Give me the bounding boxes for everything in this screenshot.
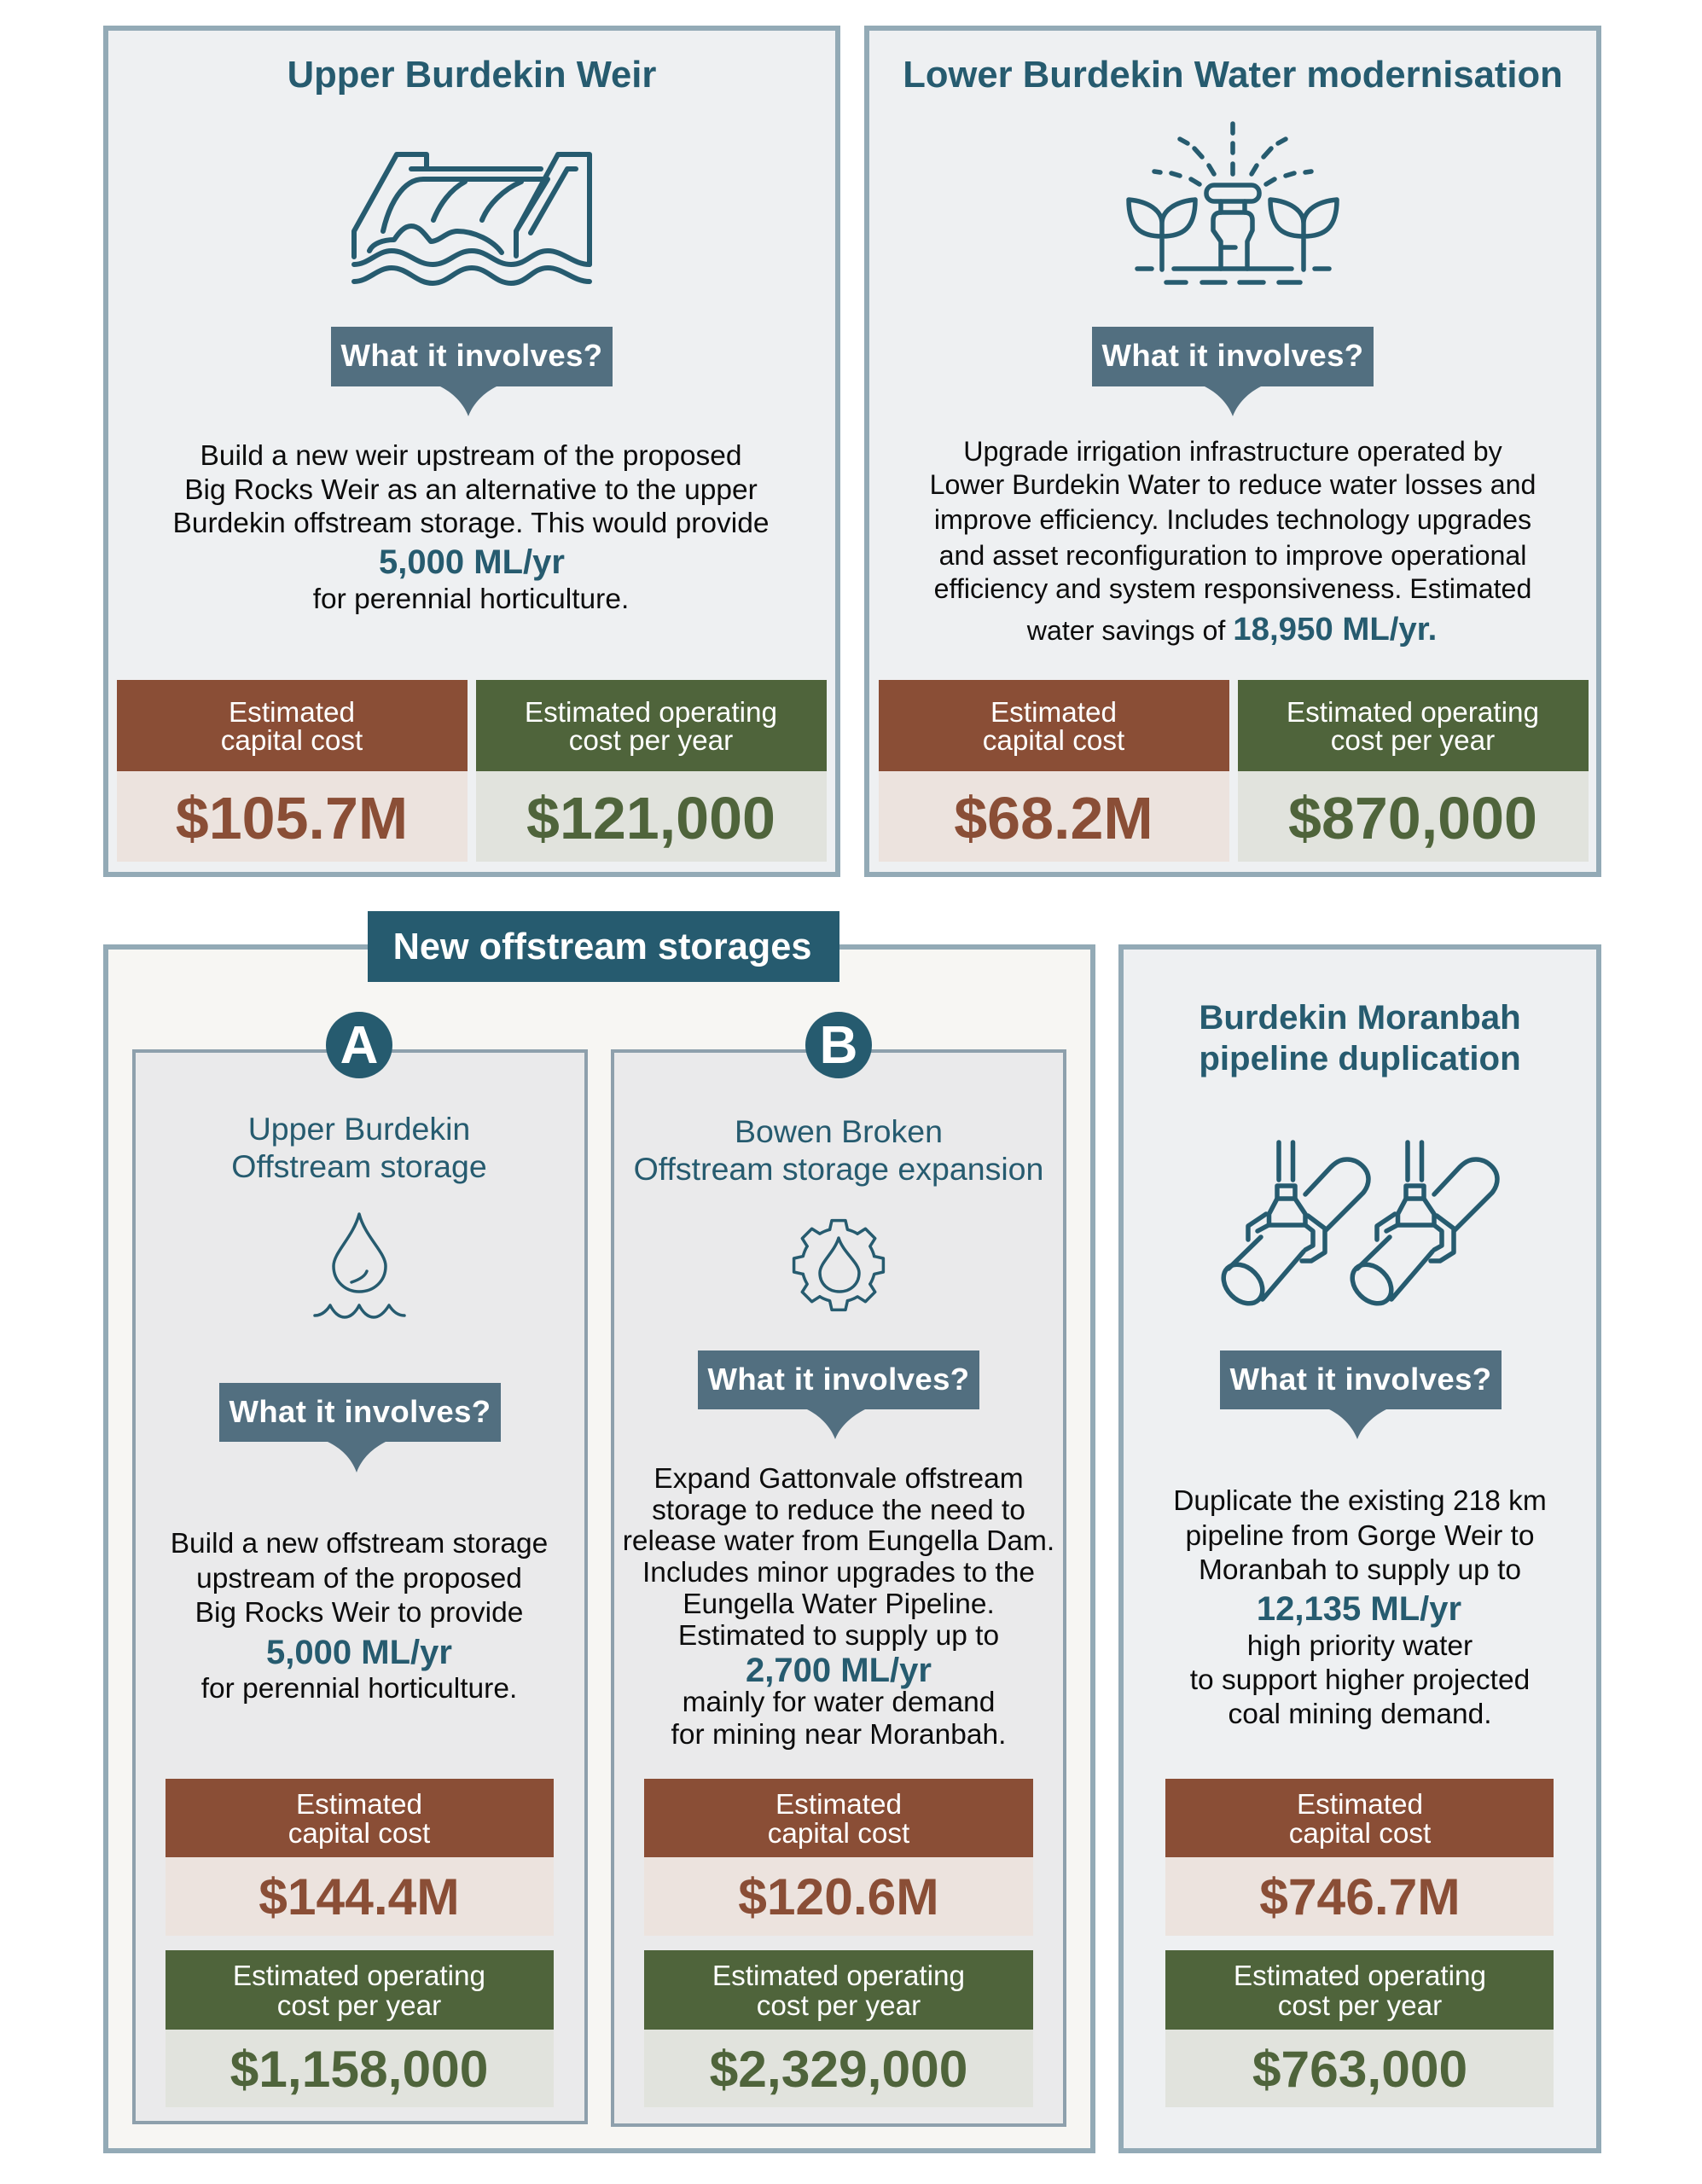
text block: description: Burdekin offstream storage. This would provide <box>173 508 769 539</box>
text block: description: 12,135 ML/yr <box>1257 1590 1461 1628</box>
heading: Upper Burdekin Weir: Upper Burdekin Weir <box>288 55 656 96</box>
icon: sprinkler and plants <box>1129 124 1337 282</box>
capital cost card: capital cost <box>1289 1818 1431 1850</box>
capital cost card: capital cost <box>768 1818 909 1850</box>
text block: description: Lower Burdekin Water to reduce water losses and <box>930 469 1536 500</box>
text block: description: Build a new offstream storage <box>171 1528 548 1560</box>
text block: description: Build a new weir upstream of the proposed <box>200 440 742 472</box>
text block: description: for perennial horticulture. <box>313 584 629 615</box>
capital cost card: Estimated <box>990 697 1117 729</box>
badge B: B <box>820 1016 857 1075</box>
text block: description: to support higher projected <box>1190 1664 1530 1696</box>
operating cost card: $870,000 <box>1288 785 1537 851</box>
operating cost card <box>1238 680 1589 862</box>
operating cost card <box>166 1950 554 2107</box>
capital cost card: Estimated <box>775 1789 902 1821</box>
text block: description: storage to reduce the need to <box>652 1495 1025 1526</box>
text block: description: Includes minor upgrades to the <box>642 1557 1035 1589</box>
capital cost card: $68.2M <box>954 785 1153 851</box>
operating cost card: $2,329,000 <box>710 2040 967 2098</box>
text block: description <box>173 440 769 615</box>
heading: B: Offstream storage expansion <box>634 1151 1043 1187</box>
heading: B <box>634 1113 1043 1187</box>
operating cost card: Estimated operating <box>525 697 777 729</box>
text block: description: and asset reconfiguration to improve operational <box>939 540 1526 571</box>
text block: description <box>1173 1485 1547 1730</box>
capital cost card: Estimated <box>229 697 355 729</box>
operating cost card: Estimated operating <box>712 1960 965 1992</box>
operating cost card: Estimated operating <box>1287 697 1539 729</box>
sub-panel A: Upper Burdekin Offstream storage <box>134 1012 586 2123</box>
callout: What it involves?: What it involves? <box>1230 1362 1491 1397</box>
capital cost card: capital cost <box>221 725 363 757</box>
capital cost card <box>1165 1779 1554 1936</box>
capital cost card <box>644 1779 1033 1936</box>
callout: What it involves?: What it involves? <box>708 1362 969 1397</box>
text block: description: for perennial horticulture. <box>201 1673 517 1705</box>
callout: What it involves?: What it involves? <box>229 1394 491 1429</box>
text block: description: water savings of 18,950 ML/yr. <box>1026 611 1437 648</box>
badge B <box>805 1012 872 1078</box>
heading: Lower Burdekin Water modernisation: Lower Burdekin Water modernisation <box>903 55 1563 96</box>
capital cost card <box>166 1779 554 1936</box>
operating cost card: Estimated operating <box>1234 1960 1486 1992</box>
text block: description: Big Rocks Weir to provide <box>195 1597 523 1629</box>
heading: Burdekin Moranbah pipeline duplication: pipeline duplication <box>1199 1039 1521 1077</box>
text block: description: high priority water <box>1247 1630 1473 1662</box>
callout: What it involves? <box>1092 327 1374 416</box>
operating cost card: cost per year <box>757 1990 921 2022</box>
capital cost card: capital cost <box>983 725 1124 757</box>
heading tab: New offstream storages: New offstream storages <box>393 926 811 967</box>
heading: Burdekin Moranbah pipeline duplication: Burdekin Moranbah <box>1199 998 1521 1037</box>
callout: What it involves?: What it involves? <box>1102 338 1363 373</box>
capital cost card: $144.4M <box>258 1867 460 1926</box>
operating cost card: cost per year <box>277 1990 441 2022</box>
text block: description: coal mining demand. <box>1228 1699 1492 1730</box>
callout: What it involves? <box>219 1383 501 1472</box>
badge A: A <box>340 1016 378 1075</box>
capital cost card: $746.7M <box>1259 1867 1461 1926</box>
operating cost card: $763,000 <box>1252 2040 1467 2098</box>
panel: Burdekin Moranbah pipeline duplication <box>1121 947 1599 2151</box>
badge A <box>326 1012 392 1078</box>
capital cost card: capital cost <box>288 1818 430 1850</box>
operating cost card: cost per year <box>569 725 733 757</box>
text block: description: 5,000 ML/yr <box>266 1634 452 1671</box>
operating cost card: cost per year <box>1331 725 1495 757</box>
text block: description: improve efficiency. Includes technology upgrades <box>934 504 1531 535</box>
text block: description: Upgrade irrigation infrastructure operated by <box>963 436 1503 467</box>
operating cost card: cost per year <box>1278 1990 1442 2022</box>
text block: description: 5,000 ML/yr <box>379 543 565 581</box>
heading: A <box>231 1111 487 1184</box>
text block: description: Estimated to supply up to <box>678 1620 999 1652</box>
text block: description <box>623 1463 1054 1751</box>
callout: What it involves?: What it involves? <box>341 338 602 373</box>
text block: description: Expand Gattonvale offstream <box>653 1463 1024 1495</box>
heading tab: New offstream storages <box>368 911 839 982</box>
heading: A: Offstream storage <box>231 1148 487 1184</box>
panel: Lower Burdekin Water modernisation <box>867 28 1599 874</box>
callout: What it involves? <box>1220 1350 1502 1439</box>
capital cost card <box>879 680 1229 862</box>
text block: description: Duplicate the existing 218 km <box>1173 1485 1547 1517</box>
text block: description: mainly for water demand <box>683 1687 995 1718</box>
panel: New offstream storages <box>106 911 1093 2151</box>
operating cost card: $1,158,000 <box>230 2040 488 2098</box>
text block: description: pipeline from Gorge Weir to <box>1185 1520 1535 1552</box>
panel: Upper Burdekin Weir <box>106 28 838 874</box>
capital cost card <box>117 680 468 862</box>
sub-panel B: Bowen Broken Offstream storage expansion <box>613 1012 1065 2125</box>
capital cost card: $105.7M <box>176 785 408 851</box>
text block: description: release water from Eungella Dam. <box>623 1525 1054 1557</box>
icon: gear with water drop <box>793 1220 884 1310</box>
text block: description: Big Rocks Weir as an alternative to the upper <box>184 474 758 506</box>
capital cost card: Estimated <box>296 1789 422 1821</box>
callout: What it involves? <box>331 327 613 416</box>
text block: description: 2,700 ML/yr <box>746 1652 932 1689</box>
callout: What it involves? <box>698 1350 979 1439</box>
text block: description <box>930 436 1536 648</box>
heading: B: Bowen Broken <box>735 1113 943 1149</box>
icon: weir <box>354 154 590 283</box>
operating cost card: Estimated operating <box>233 1960 485 1992</box>
text block: description: Moranbah to supply up to <box>1199 1554 1521 1586</box>
heading: Burdekin Moranbah pipeline duplication <box>1199 998 1521 1077</box>
capital cost card: $120.6M <box>738 1867 939 1926</box>
text block: description: for mining near Moranbah. <box>671 1719 1006 1751</box>
text block: description <box>171 1528 548 1705</box>
operating cost card <box>1165 1950 1554 2107</box>
operating cost card: $121,000 <box>526 785 775 851</box>
capital cost card: Estimated <box>1297 1789 1423 1821</box>
operating cost card <box>476 680 827 862</box>
text block: description: efficiency and system responsiveness. Estimated <box>934 573 1531 604</box>
icon: two pipelines with clamps <box>1216 1142 1497 1311</box>
operating cost card <box>644 1950 1033 2107</box>
icon: water drop with waves <box>315 1214 404 1317</box>
text block: description: Eungella Water Pipeline. <box>683 1589 995 1620</box>
heading: A: Upper Burdekin <box>248 1111 470 1147</box>
text block: description: upstream of the proposed <box>196 1563 522 1594</box>
